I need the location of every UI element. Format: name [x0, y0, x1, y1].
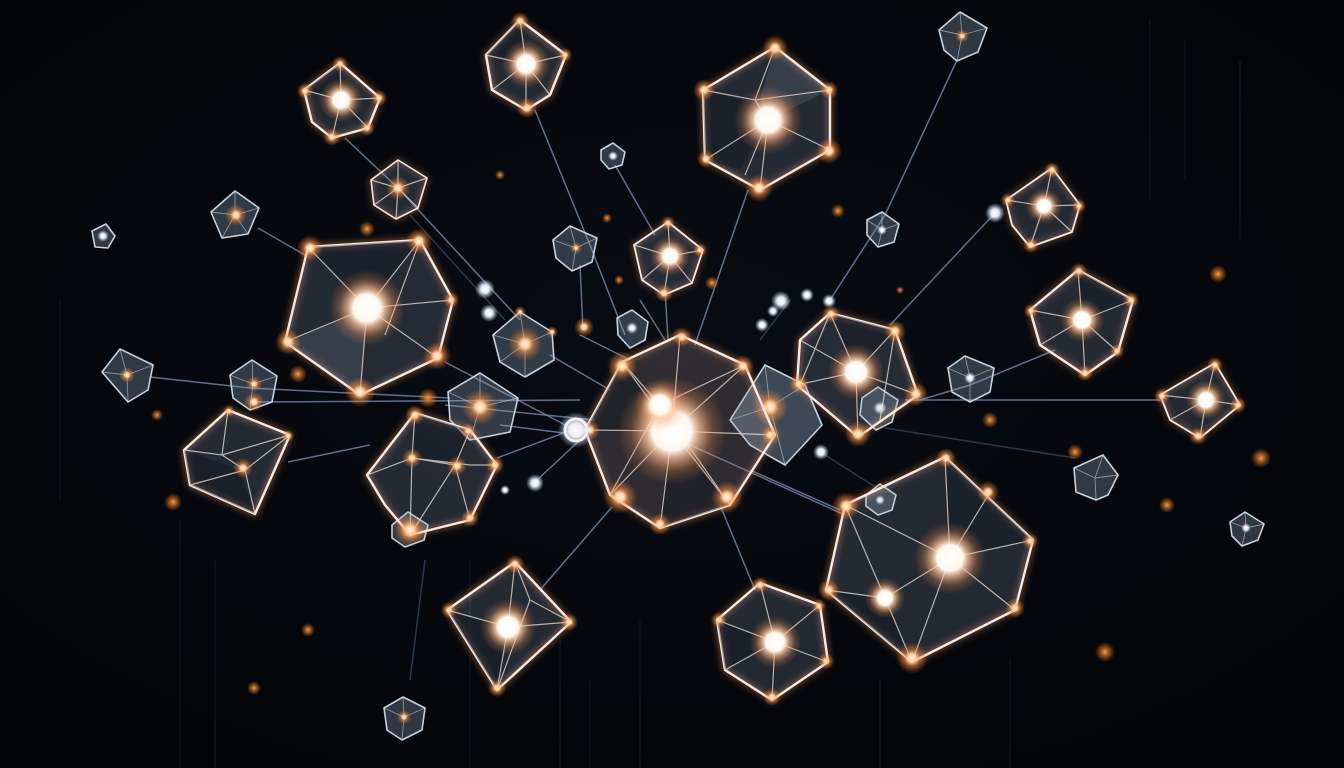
polyhedron: top centre large	[693, 35, 842, 202]
polyhedron: lower right large	[818, 448, 1038, 674]
polyhedron: small upper left	[371, 160, 427, 219]
polyhedron: upper left small	[211, 191, 259, 238]
polyhedron: centre top small	[634, 216, 707, 302]
polyhedron: top right	[939, 12, 987, 61]
polyhedron: central small	[493, 306, 558, 377]
polyhedron: below left cluster	[392, 512, 428, 547]
polyhedron: top centre left	[486, 12, 572, 118]
polyhedron: upper left	[297, 56, 387, 146]
polyhedron: left lower	[367, 405, 504, 546]
polyhedron: behind lower right	[866, 484, 896, 515]
polyhedron: central hub	[580, 327, 780, 535]
polyhedron: left small	[102, 349, 153, 402]
polyhedron: left small 2	[230, 360, 277, 412]
polyhedron: left large	[275, 228, 459, 407]
polyhedron: lower right small	[1074, 455, 1118, 500]
polyhedron: right small	[948, 356, 994, 402]
polyhedron: far right small	[1230, 512, 1264, 546]
polyhedron: behind right	[860, 387, 898, 430]
white particles	[475, 203, 1005, 495]
polyhedron: bottom left	[441, 555, 578, 697]
polyhedron: far left	[92, 224, 115, 248]
polyhedron: left cube	[184, 405, 294, 514]
amber particles	[151, 170, 1271, 695]
connection lines	[150, 60, 1160, 680]
polyhedron: right	[1024, 263, 1139, 381]
polyhedron: mid right tiny	[867, 212, 899, 247]
polyhedron: tiny top	[601, 143, 625, 169]
polyhedron: bottom centre	[711, 577, 834, 706]
polyhedron: mid small	[553, 226, 597, 271]
polyhedron: behind centre right	[730, 365, 822, 465]
polyhedron: right centre	[789, 305, 928, 447]
polyhedron: near centre left	[448, 373, 518, 440]
junction ring node	[558, 412, 594, 448]
polyhedron: bottom small	[384, 697, 425, 740]
polyhedron: tiny centre	[617, 310, 648, 348]
polyhedron: top right	[1001, 162, 1086, 253]
polyhedron: far right	[1154, 357, 1246, 445]
